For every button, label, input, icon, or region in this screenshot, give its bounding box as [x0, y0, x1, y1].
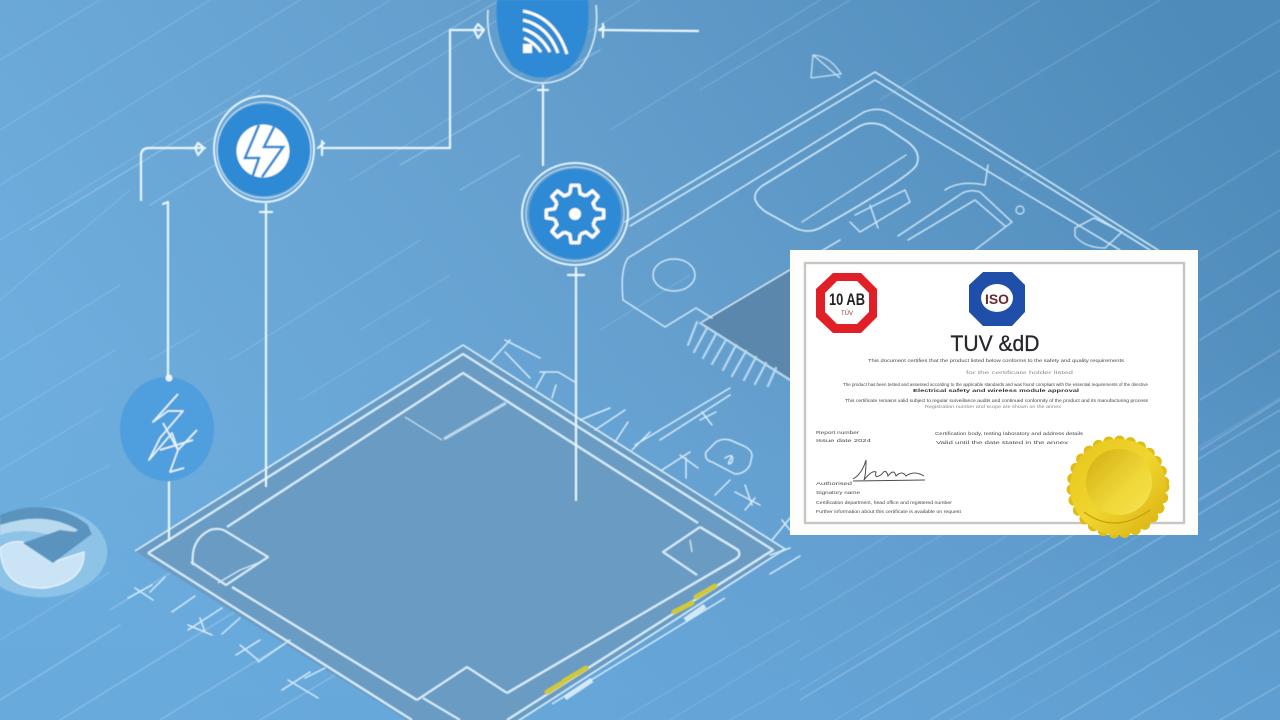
certificate body text: [816, 358, 1149, 514]
inner outline: [227, 373, 739, 700]
notch top: [405, 417, 442, 440]
badge: blue octagon: [969, 272, 1025, 326]
certificate title: TUV &dD: [950, 331, 1040, 356]
dark device plate: [700, 262, 800, 385]
plate outer rim: [135, 345, 785, 720]
blueprint ticks: [128, 340, 800, 698]
yellow contacts: [547, 586, 715, 692]
icon: sketched lightning node: [120, 374, 214, 481]
icon: wifi node: [488, 0, 597, 83]
certificate body text: Authorised: [816, 481, 853, 486]
badge: red octagon: [816, 273, 877, 333]
panel: back device outline: [622, 72, 1158, 386]
icon: check badge: [0, 506, 108, 598]
certificate body text: Further information about this certificate is available on request: [816, 509, 962, 514]
certificate body text: The product has been tested and assessed according to the applicable standards and was found compliant with the essential requirements of the directive: [843, 382, 1148, 387]
certificate body text: This document certifies that the product listed below conforms to the safety and quality requirements: [868, 358, 1125, 363]
certificate body text: Valid until the date stated in the annex: [936, 440, 1069, 445]
plate edge hardware: [547, 586, 725, 704]
badge: red octagon: TÜV: [841, 310, 853, 317]
panel: front device plate: [135, 345, 785, 720]
certificate body text: This certificate remains valid subject to regular surveillance audits and continued conformity of the product and its manufacturing process: [845, 398, 1149, 403]
comb teeth: [688, 322, 790, 386]
badge: blue octagon: ISO: [985, 291, 1009, 307]
certificate body text: Electrical safety and wireless module approval: [913, 388, 1079, 393]
certificate body text: Signatory name: [816, 490, 861, 495]
corner notch left: [191, 529, 268, 585]
certificate body text: Report number: [816, 430, 860, 435]
icon: gear node: [522, 163, 628, 265]
certificate body text: for the certificate holder listed: [966, 370, 1074, 375]
certificate card: [790, 250, 1198, 535]
notch bottom: [417, 667, 507, 720]
plate body: [135, 346, 785, 720]
corner pad: [1075, 218, 1122, 248]
gold seal: [1070, 439, 1166, 535]
pill window: [755, 123, 918, 231]
certificate body text: Certification department, head office and registered number: [816, 500, 953, 505]
icon: power bolt node: [214, 96, 314, 202]
panel: certificate: [790, 250, 1198, 535]
white edge bars: [565, 606, 705, 698]
signature: [853, 460, 925, 481]
certificate body text: Issue date 2024: [816, 438, 872, 443]
certificate body text: Certification body, testing laboratory and address details: [935, 431, 1084, 436]
badge: red octagon: 10 AB: [829, 290, 865, 309]
certificate body text: Registration number and scope are shown on the annex: [925, 404, 1062, 409]
certificate frame: [805, 263, 1184, 523]
notch right: [663, 527, 700, 575]
connector lines: [141, 24, 698, 540]
round port: [653, 259, 695, 291]
icon: antenna sketch: [811, 55, 841, 78]
camera block: [850, 165, 1012, 250]
